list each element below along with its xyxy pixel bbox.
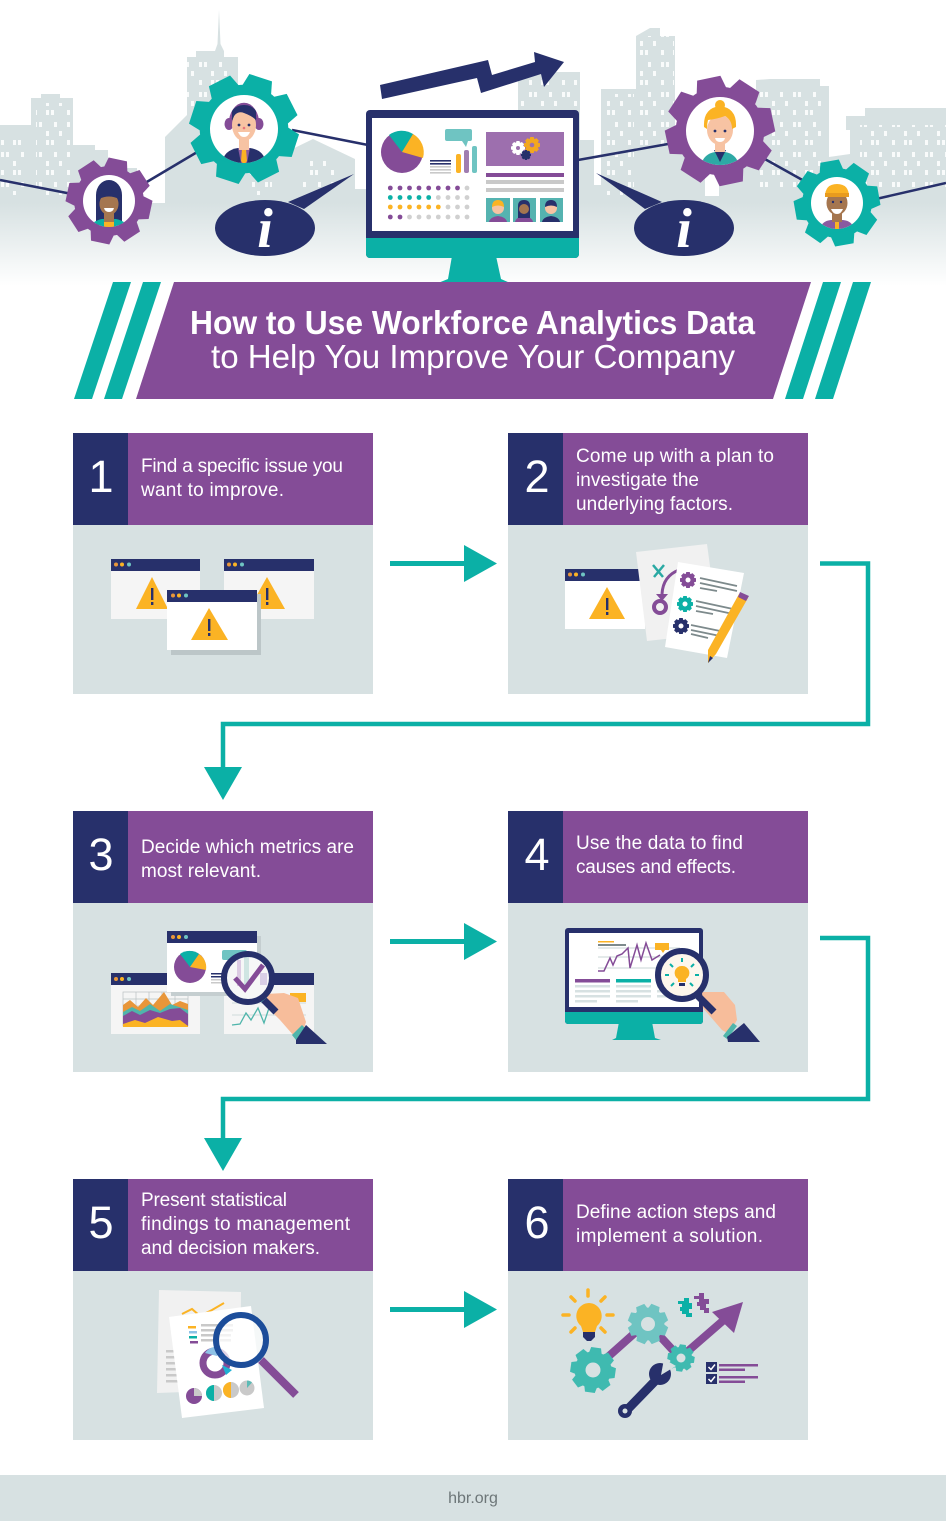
panel: step 5: and decision makers. (141, 1238, 320, 1259)
banner stripes right (785, 282, 871, 399)
icon: info speech bubble right (596, 173, 734, 260)
panel: step 1 (73, 433, 373, 694)
panel: step 1: Find a specific issue you (141, 456, 343, 477)
connector: step 4 to 5 (204, 938, 868, 1171)
ground fade (0, 203, 946, 286)
connector lines between gears and monitor (0, 130, 946, 199)
icon: purple gear with woman avatar (66, 158, 152, 244)
panel: step 3: Decide which metrics are (141, 837, 354, 858)
panel: step 3: 3 (88, 829, 114, 880)
icon: info speech bubble right: i (676, 198, 692, 260)
panel: step 5 (73, 1179, 373, 1440)
panel: step 4: 4 (524, 829, 550, 880)
icon: dashboard monitor (366, 110, 579, 283)
icon: info speech bubble left (215, 174, 354, 260)
title line 2: to Help You Improve Your Company (211, 338, 736, 375)
arrow: step 1 to 2 (390, 545, 497, 582)
panel: step 6: Define action steps and (576, 1202, 776, 1223)
icon: rising arrow above monitor (380, 52, 564, 99)
panel: step 2 (508, 433, 808, 694)
footer text: hbr.org (448, 1490, 498, 1507)
arrow: step 3 to 4 (390, 923, 497, 960)
icon: report papers with magnifier (157, 1290, 296, 1418)
panel: step 2: underlying factors. (576, 494, 733, 515)
panel: step 6 (508, 1179, 808, 1440)
panel: step 3: most relevant. (141, 861, 261, 882)
panel: step 1: 1 (88, 451, 114, 502)
icon: teal gear with hard hat worker avatar (794, 160, 880, 246)
title line 1: How to Use Workforce Analytics Data (190, 304, 756, 341)
panel: step 4: causes and effects. (576, 857, 736, 878)
icon: monitor with line chart and magnifier (565, 928, 760, 1042)
arrow: step 5 to 6 (390, 1291, 497, 1328)
panel: step 1: want to improve. (140, 480, 284, 501)
panel: step 4 (508, 811, 808, 1072)
panel: step 3 (73, 811, 373, 1072)
banner background (136, 282, 811, 399)
panel: step 6: 6 (524, 1197, 550, 1248)
icon: action steps with gears, bulb and wrench (563, 1290, 758, 1418)
panel: step 2: 2 (524, 451, 550, 502)
icon: three warning windows (111, 559, 314, 655)
panel: step 6: implement a solution. (576, 1226, 763, 1247)
icon: teal gear with headset agent avatar (189, 74, 299, 184)
connector: step 2 to 3 (204, 564, 868, 800)
panel: step 2: investigate the (576, 470, 699, 491)
panel: step 4: Use the data to find (576, 833, 743, 854)
panel: step 2: Come up with a plan to (576, 446, 774, 467)
panel: step 5: Present statistical (141, 1190, 287, 1211)
icon: plan documents with pencil (565, 544, 749, 663)
icon: metric windows and magnifier (111, 931, 327, 1044)
icon: info speech bubble left: i (257, 198, 273, 260)
city skyline background (0, 10, 946, 204)
banner stripes left (74, 282, 161, 399)
panel: step 5: 5 (88, 1197, 114, 1248)
footer bar (0, 1475, 946, 1521)
icon: purple gear with blonde woman avatar (664, 76, 776, 186)
title banner (74, 282, 871, 399)
panel: step 5: findings to management (141, 1214, 351, 1235)
